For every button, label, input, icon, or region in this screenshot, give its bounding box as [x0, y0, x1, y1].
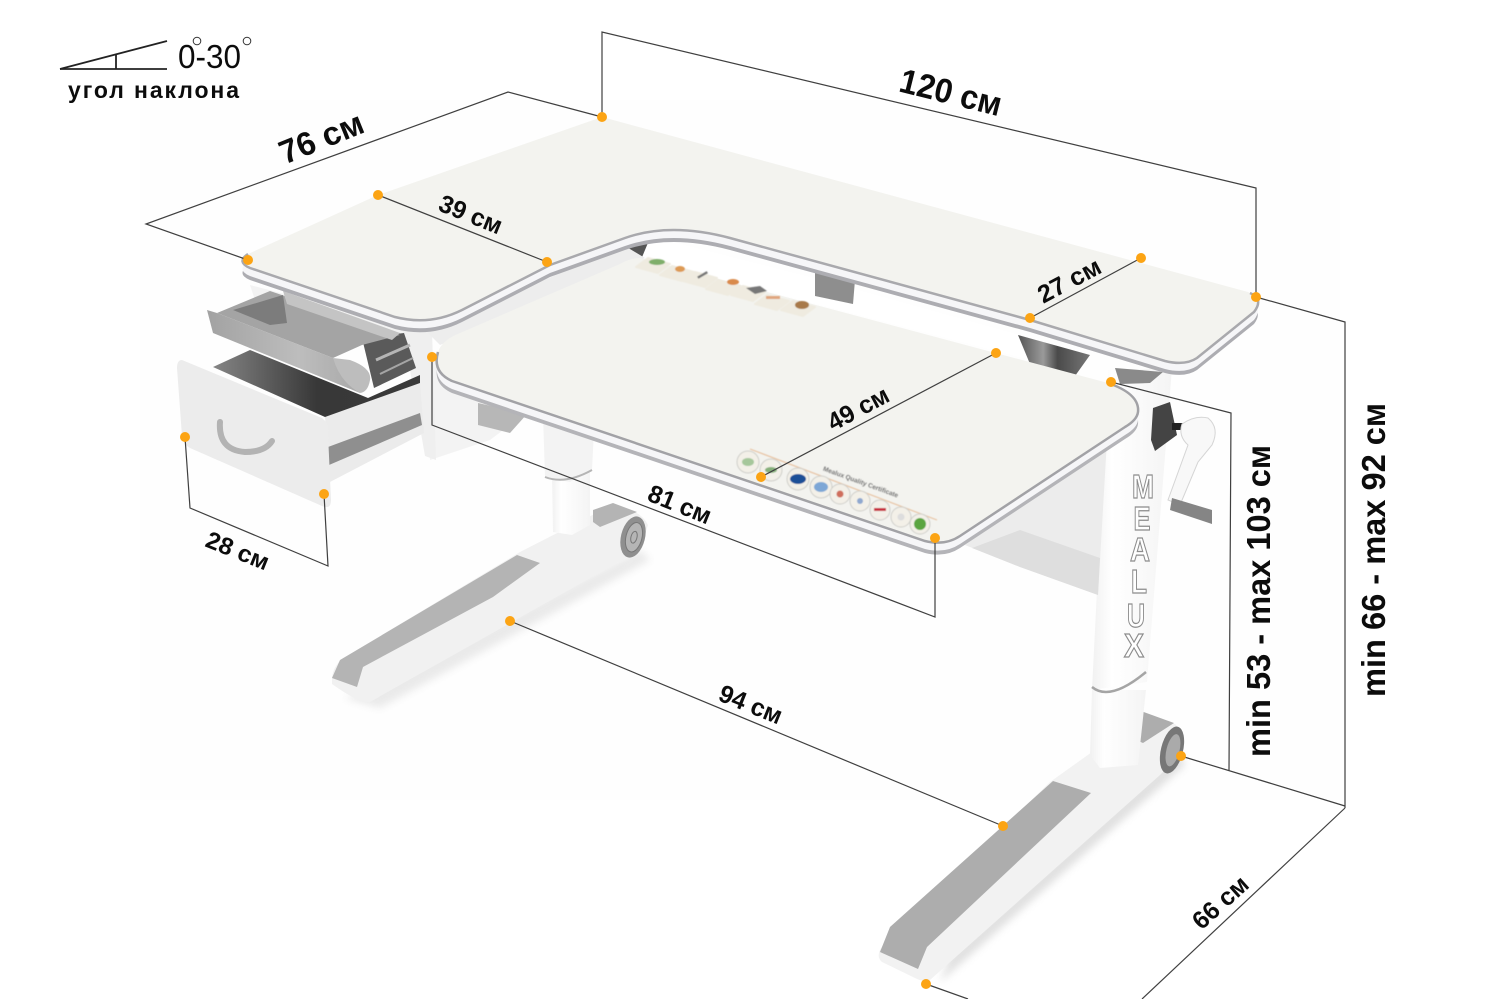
dimension lines — [146, 32, 1345, 999]
front — [177, 360, 331, 507]
brand lettering: M — [1132, 468, 1154, 505]
end cap — [333, 358, 370, 393]
icon: angle — [60, 41, 167, 69]
certificate row: Mealux Quality Certificate — [822, 466, 899, 500]
foot body — [332, 506, 648, 702]
shadow — [940, 752, 1185, 982]
rail — [328, 413, 422, 465]
shadow — [345, 550, 650, 708]
tilt angle legend — [60, 37, 251, 103]
lower drawer — [177, 350, 424, 507]
brand lettering — [1124, 468, 1154, 664]
label: 28 cm: 28 см — [202, 527, 273, 576]
rear supports under top — [618, 236, 1090, 376]
brand lettering: L — [1131, 563, 1147, 600]
lower desk surface — [437, 258, 1138, 555]
side — [325, 383, 424, 482]
grey pad rear — [593, 503, 637, 527]
label: 27 cm: 27 см — [1033, 253, 1106, 309]
label: 49 cm: 49 см — [823, 381, 894, 437]
wheel — [1156, 724, 1188, 776]
grey pad front — [880, 781, 1091, 969]
front edge line — [242, 230, 1258, 363]
surface — [437, 258, 1138, 543]
degree signs — [193, 37, 251, 45]
grey pad rear — [1136, 710, 1174, 743]
pedestal — [250, 285, 530, 460]
grey bracket below top — [1115, 368, 1163, 384]
left column — [543, 415, 594, 535]
wheel — [616, 514, 650, 560]
arm — [1168, 417, 1215, 505]
upper drawer tray — [207, 291, 416, 393]
rail — [362, 333, 416, 388]
interior — [213, 350, 420, 417]
front lip — [207, 310, 360, 393]
label: 39 cm: 39 см — [435, 190, 506, 240]
rear icon tiles — [636, 258, 815, 316]
label: depth 76 cm: 76 см — [273, 104, 369, 171]
label: 66 cm: 66 см — [1187, 870, 1255, 935]
grey pad front — [332, 555, 540, 687]
brand lettering: U — [1127, 597, 1145, 634]
foot body — [879, 712, 1182, 981]
top desk surface — [242, 117, 1258, 375]
grip — [1170, 498, 1212, 524]
panel under lower top — [965, 440, 1107, 595]
certificate row — [737, 449, 937, 534]
inside — [217, 291, 400, 358]
surface — [242, 117, 1258, 363]
brand lettering: E — [1134, 500, 1150, 537]
caption: угол наклона — [68, 77, 239, 103]
handle — [220, 422, 272, 452]
angle value: 0-30 — [178, 38, 241, 75]
label: width 120 cm: 120 см — [896, 62, 1006, 124]
bracket — [1151, 402, 1177, 451]
crank handle — [1151, 402, 1215, 524]
orange dimension markers — [180, 112, 1261, 989]
label: 94 cm: 94 см — [715, 680, 786, 730]
brand lettering: X — [1124, 627, 1144, 664]
label: desk height range: min 66 - max 92 см — [1355, 403, 1392, 697]
vent grille — [478, 403, 527, 433]
link frame below left wing — [425, 246, 645, 345]
right foot — [879, 710, 1188, 982]
label: knee height range: min 53 - max 103 см — [1240, 445, 1277, 757]
brand lettering: A — [1130, 531, 1150, 568]
label: 81 cm: 81 см — [644, 480, 715, 530]
right column — [1090, 368, 1172, 768]
front edge line — [437, 352, 1138, 543]
left foot — [332, 503, 650, 708]
